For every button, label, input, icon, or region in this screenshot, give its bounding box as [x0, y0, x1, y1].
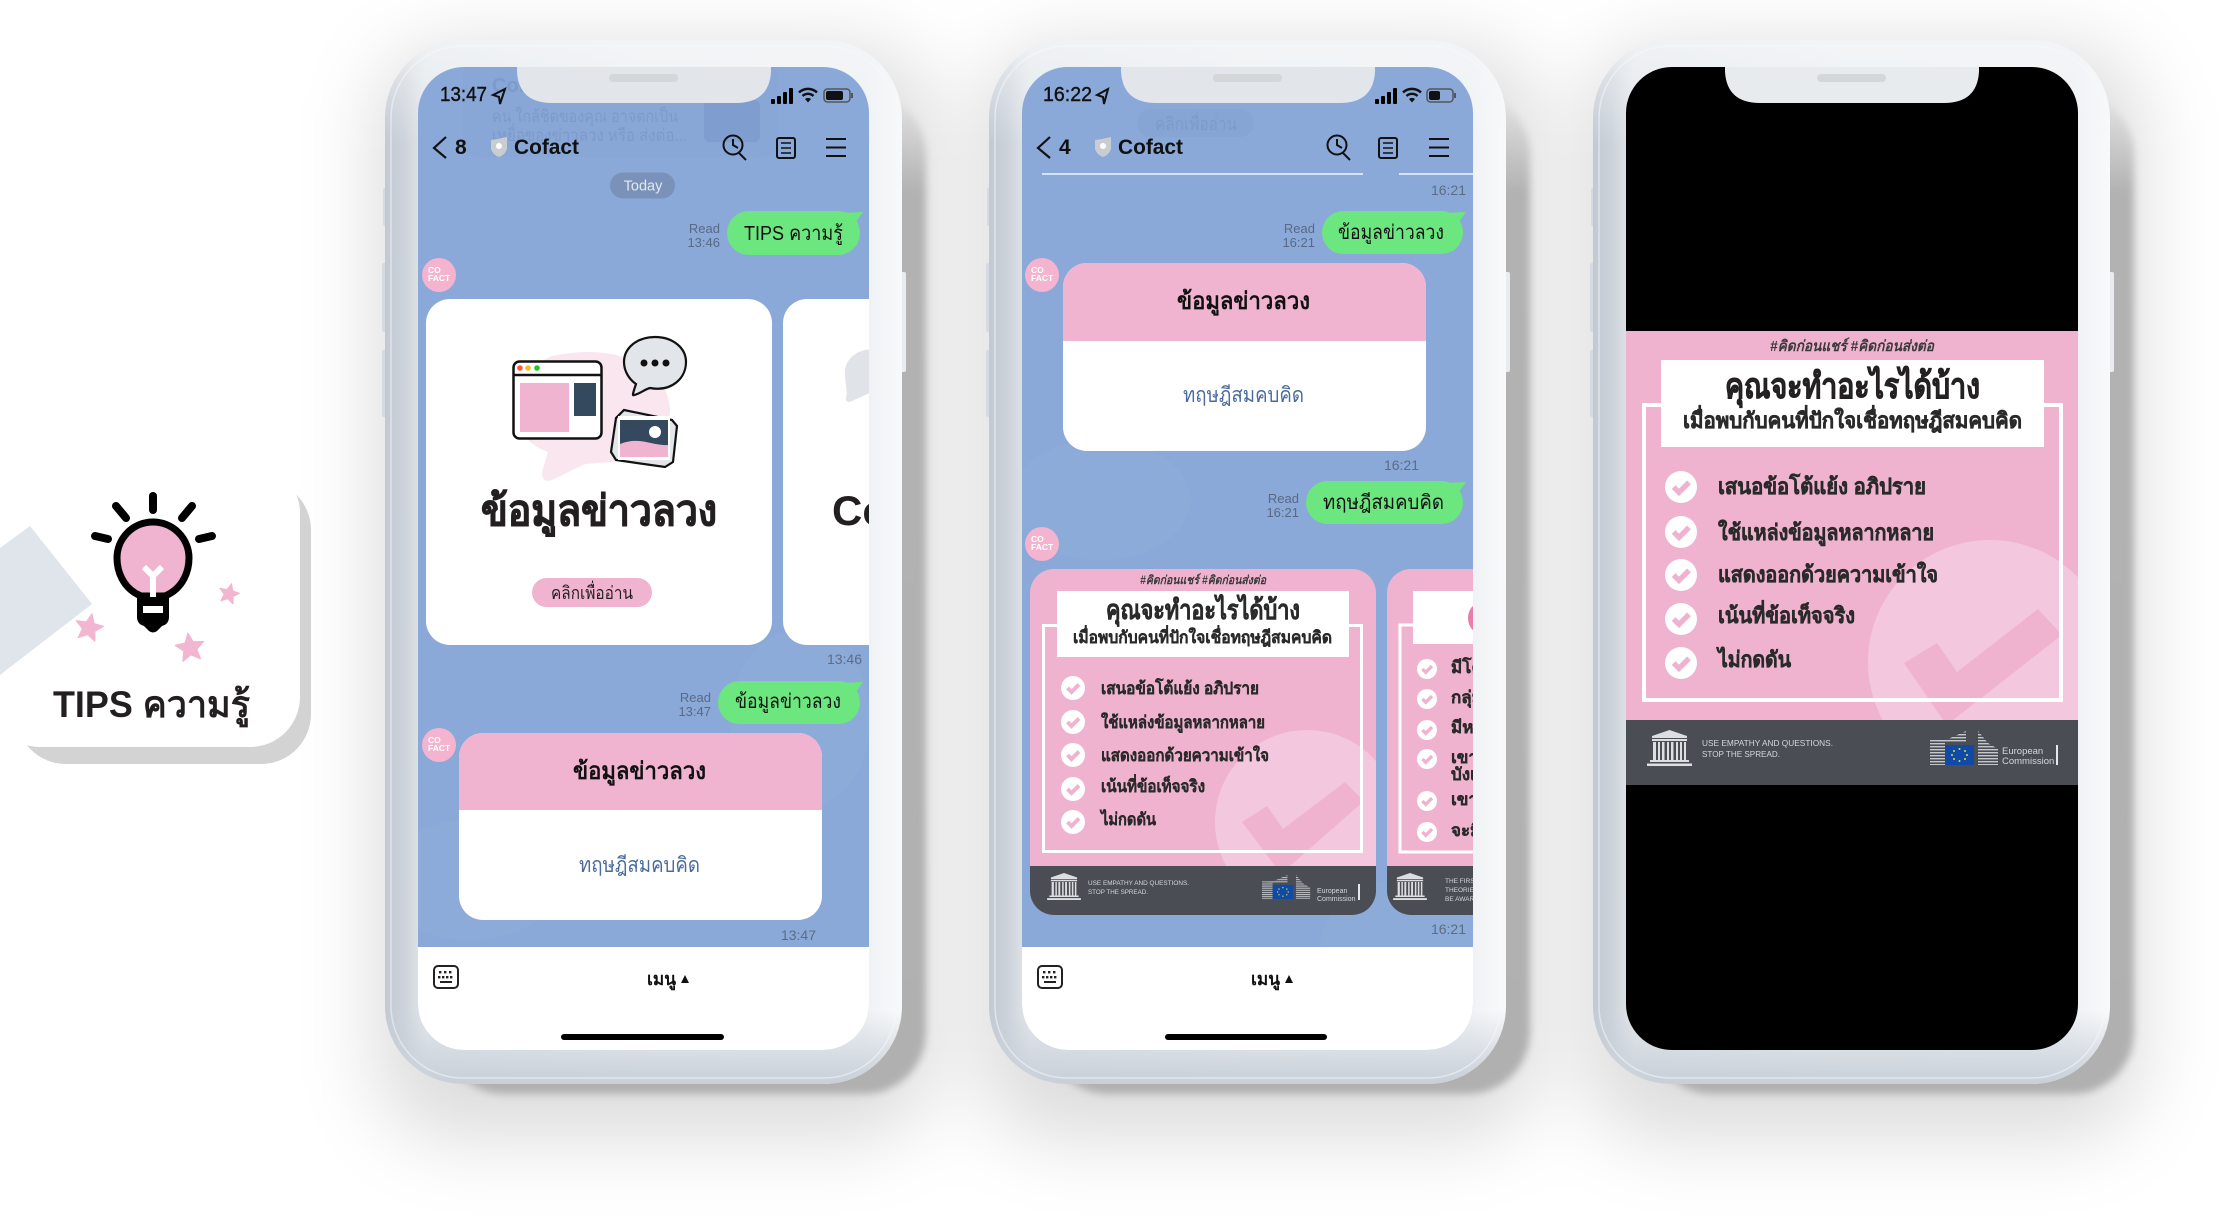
message card: ข้อมูลข่าวลวง — [573, 758, 706, 786]
phone 1 — [380, 40, 926, 1094]
poster card 2 peek: BE AWARE — [1445, 896, 1479, 903]
green bubble: theory: 16:21 — [1266, 505, 1299, 520]
green bubble: TIPS: TIPS ความรู้ — [744, 223, 843, 246]
today pill: Today — [624, 178, 663, 194]
poster card: what you can do — [1030, 569, 1399, 915]
status bar: 16:22 — [1043, 84, 1092, 106]
speaker — [1817, 74, 1886, 82]
green bubble: fake news: ข้อมูลข่าวลวง — [735, 691, 841, 714]
ghost message behind header: Cofa — [492, 75, 537, 97]
speaker — [1213, 74, 1282, 82]
message card: ทฤษฎีสมคบคิด — [1183, 384, 1304, 407]
green bubble: theory: ทฤษฎีสมคบคิด — [1323, 492, 1444, 514]
status bar — [1044, 86, 1456, 104]
avatar: FACT — [428, 273, 451, 283]
poster card 2 peek: มีหล — [1451, 717, 1484, 737]
timestamp: 16:21 — [1431, 921, 1466, 937]
phone frame — [382, 40, 906, 1084]
ghost message behind header — [493, 78, 760, 142]
phone shadow — [442, 92, 926, 1094]
checklist: แสดงออกด้วยความเข้าใจ — [1718, 561, 1938, 587]
footer logos: USE EMPATHY AND QUESTIONS. — [1088, 880, 1189, 887]
bottom bar — [1022, 947, 1473, 1057]
poster: what you can do: เมื่อพบกับคนที่ปักใจเชื่อทฤษฎีสมคบคิด — [1683, 404, 2022, 433]
avatar — [422, 258, 456, 292]
icon: stars — [73, 581, 242, 662]
avatar — [422, 728, 456, 762]
phone frame — [1590, 40, 2114, 1084]
hashtags: #คิดก่อนแชร์ #คิดก่อนส่งต่อ — [1140, 573, 1267, 587]
green bubble: TIPS: Read — [689, 221, 720, 236]
checklist — [1061, 676, 1269, 834]
phone frame — [986, 40, 1510, 1084]
nav bar — [434, 136, 846, 160]
bottom bar: เมนู — [647, 969, 677, 991]
green bubble: fake news — [678, 681, 863, 724]
avatar: CO — [428, 265, 441, 275]
footer: European — [2002, 746, 2043, 757]
checklist: ใช้แหล่งข้อมูลหลากหลาย — [1101, 712, 1265, 734]
screen — [1626, 60, 2112, 1050]
button — [532, 578, 652, 607]
white frame — [1044, 626, 1362, 852]
phone shadow — [1650, 92, 2134, 1094]
footer: Commission — [2002, 756, 2054, 767]
poster card 2 peek: มีโค — [1451, 657, 1483, 677]
screen — [1022, 67, 1473, 1050]
message card: ทฤษฎีสมคบคิด — [579, 854, 700, 877]
nav bar: Cofact — [1118, 136, 1183, 159]
white frame — [1644, 405, 2061, 700]
green bubble: theory: Read — [1268, 491, 1299, 506]
poster card 2 peek: THE FIRST — [1445, 878, 1479, 885]
checklist: เสนอข้อโต้แย้ง อภิปราย — [1101, 678, 1259, 698]
poster: what you can do: คุณจะทำอะไรได้บ้าง — [1725, 365, 1980, 408]
today pill — [610, 172, 675, 198]
poster card: what you can do: เมื่อพบกับคนที่ปักใจเชื่อทฤษฎีสมคบคิด — [1073, 625, 1332, 647]
notch — [1725, 60, 1979, 103]
checklist — [1665, 471, 1938, 679]
ghost card behind header — [1042, 60, 1473, 174]
footer logos: European — [1317, 888, 1347, 895]
avatar: CO — [428, 735, 441, 745]
message card: ข้อมูลข่าวลวง — [1177, 288, 1310, 316]
green bubble: fake news: Read — [1284, 221, 1315, 236]
screen — [418, 67, 869, 1050]
avatar: CO — [1031, 265, 1044, 275]
green bubble: fake news — [1282, 211, 1466, 254]
status bar: 13:47 — [440, 84, 487, 106]
green bubble: TIPS: 13:46 — [687, 235, 720, 250]
status bar — [441, 86, 853, 104]
checklist: แสดงออกด้วยความเข้าใจ — [1101, 745, 1269, 765]
speaker — [609, 74, 678, 82]
title box — [1057, 591, 1349, 657]
card 2 peek: Co — [832, 487, 888, 534]
poster card 2 peek: บังเ — [1451, 765, 1476, 784]
poster: what you can do — [1626, 331, 2112, 785]
grey diamond — [0, 526, 92, 675]
green bubble: fake news: 16:21 — [1282, 235, 1315, 250]
phone shadow — [1046, 92, 1530, 1094]
footer logos — [1047, 873, 1360, 903]
green bubble: TIPS — [687, 211, 863, 255]
timestamp: 16:21 — [1384, 457, 1419, 473]
nav bar: Cofact — [514, 136, 579, 159]
icon card: TIPS — [0, 463, 311, 764]
avatar: FACT — [428, 743, 451, 753]
card 2 peek — [783, 299, 869, 645]
checklist: ไม่กดดัน — [1099, 809, 1156, 829]
checklist: เสนอข้อโต้แย้ง อภิปราย — [1718, 473, 1926, 499]
poster card 2 peek: เขาะ — [1451, 748, 1487, 767]
poster card 2 peek: กลุ่ม — [1451, 688, 1483, 708]
green bubble: fake news: Read — [680, 690, 711, 705]
card: fake news: คลิกเพื่ออ่าน — [551, 580, 633, 603]
nav bar — [1038, 136, 1449, 160]
message card — [1063, 263, 1426, 451]
checklist: ใช้แหล่งข้อมูลหลากหลาย — [1718, 519, 1934, 547]
ghost card behind header: คลิกเพื่ออ่าน — [1155, 111, 1237, 134]
footer: USE EMPATHY AND QUESTIONS. — [1702, 738, 1833, 748]
checklist: ไม่กดดัน — [1716, 646, 1791, 672]
footer logos: Commission — [1317, 896, 1356, 903]
green bubble: fake news: ข้อมูลข่าวลวง — [1338, 222, 1444, 245]
poster card 2 peek: จะมี — [1451, 820, 1481, 840]
heading: TIPS: TIPS ความรู้ — [53, 684, 250, 728]
avatar: FACT — [1031, 542, 1054, 552]
nav bar: 4 — [1059, 136, 1071, 159]
avatar — [1025, 527, 1059, 561]
poster card 2 peek: เขาเ — [1451, 790, 1484, 809]
card: fake news — [426, 299, 772, 645]
timestamp: 16:21 — [1431, 182, 1466, 198]
avatar: CO — [1031, 534, 1044, 544]
timestamp: 13:47 — [781, 927, 816, 943]
phone 2 — [986, 40, 1530, 1094]
watermark check — [1868, 540, 2112, 784]
poster card 2 peek: THEORIES — [1445, 887, 1479, 894]
footer — [1030, 866, 1376, 915]
bottom bar: เมนู — [1251, 969, 1281, 991]
soft background shadows — [375, 45, 2143, 1140]
poster card 2 peek — [1387, 569, 1507, 915]
phone 3 — [1590, 40, 2134, 1094]
checklist: เน้นที่ข้อเท็จจริง — [1101, 774, 1205, 796]
icon: light bulb — [95, 496, 212, 632]
footer: STOP THE SPREAD. — [1702, 749, 1780, 759]
footer logos: STOP THE SPREAD. — [1088, 889, 1148, 896]
message card — [459, 733, 822, 920]
avatar: FACT — [1031, 273, 1054, 283]
ghost message behind header: คน ใกล้ชิดของคุณ อาจตกเป็น — [492, 105, 678, 127]
title box — [1661, 360, 2044, 447]
notch — [517, 67, 771, 103]
illustration — [513, 337, 686, 481]
footer — [1626, 720, 2078, 785]
watermark check — [1215, 730, 1399, 914]
notch — [1121, 67, 1375, 103]
green bubble: fake news: 13:47 — [678, 704, 711, 719]
checklist: เน้นที่ข้อเท็จจริง — [1718, 599, 1855, 628]
green bubble: theory — [1266, 481, 1466, 524]
bottom bar — [418, 947, 869, 1057]
ghost message behind header: เหยื่อของข่าวลวง หรือ ส่งต่อ... — [492, 123, 687, 145]
poster card: what you can do: คุณจะทำอะไรได้บ้าง — [1106, 594, 1300, 627]
avatar — [1025, 258, 1059, 292]
card title: ข้อมูลข่าวลวง — [481, 487, 717, 537]
nav bar: 8 — [455, 136, 467, 159]
timestamp: 13:46 — [827, 651, 862, 667]
hashtags: #คิดก่อนแชร์ #คิดก่อนส่งต่อ — [1770, 337, 1935, 355]
